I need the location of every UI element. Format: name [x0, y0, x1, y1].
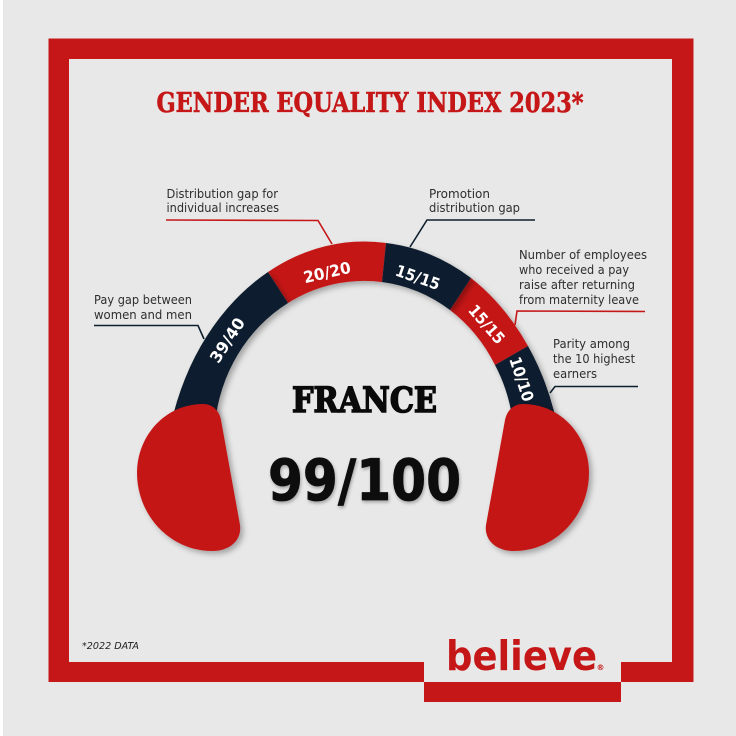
label: promotion gap: Promotion: [429, 186, 490, 201]
right ear cup: [486, 404, 589, 551]
value: 10/10: 10/10: [505, 354, 538, 404]
label: distribution gap: [166, 186, 332, 244]
segment: 15/15 maternity: [450, 278, 528, 365]
segment: 10/10: [495, 346, 557, 425]
label: maternity pay raise: who received a pay: [519, 262, 629, 277]
label: pay gap: Pay gap between: [94, 292, 192, 307]
label: distribution gap: individual increases: [166, 200, 279, 215]
left ear cup: [137, 404, 240, 551]
label: parity: the 10 highest: [553, 351, 635, 366]
label: parity: earners: [553, 366, 597, 381]
red frame: [48, 38, 694, 702]
footnote: *2022 DATA: [82, 641, 139, 652]
label: maternity pay raise: raise after returning: [519, 277, 635, 292]
label: pay gap: women and men: [94, 307, 192, 322]
label: parity: Parity among: [553, 336, 630, 351]
score: 99/100: [268, 448, 461, 514]
headphone band chart: [171, 242, 557, 425]
segment: 15/15 promotion: [382, 243, 471, 310]
segment: 39/40: [171, 272, 288, 425]
value: 15/15 promotion: 15/15: [393, 261, 443, 294]
label: distribution gap: Distribution gap for: [166, 186, 279, 201]
label: maternity pay raise: from maternity leave: [519, 292, 639, 307]
value: 15/15 maternity: 15/15: [464, 301, 509, 348]
value: 39/40: 39/40: [206, 314, 249, 366]
logo: believe: ®: [596, 663, 604, 672]
label: promotion gap: distribution gap: [429, 200, 520, 215]
title: GENDER EQUALITY INDEX 2023*: [156, 88, 584, 119]
label: promotion gap: [410, 186, 535, 247]
label: maternity pay raise: [515, 247, 647, 325]
value: 20/20: 20/20: [302, 258, 353, 287]
label: pay gap: [94, 292, 204, 339]
logo: believe: believe: [446, 632, 597, 680]
label: parity: [550, 336, 638, 393]
country name: FRANCE: [292, 380, 437, 421]
segment: 20/20: [268, 242, 386, 303]
label: maternity pay raise: Number of employees: [519, 247, 647, 262]
